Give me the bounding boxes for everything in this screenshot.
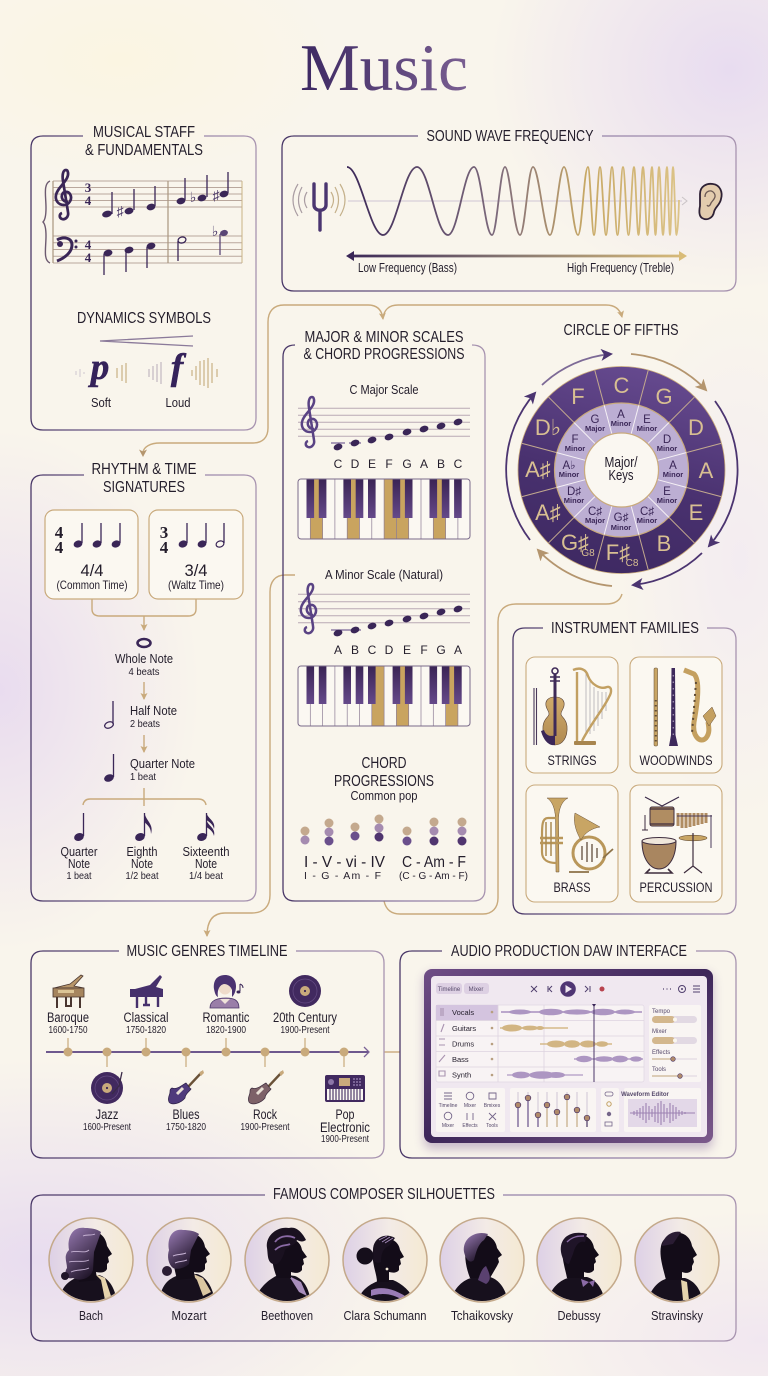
DAW tool grid: Tools	[486, 1123, 498, 1129]
major keys outer ring: E	[689, 500, 703, 525]
composer: Tchaikovsky	[440, 1218, 524, 1323]
icon: xylophone	[677, 813, 712, 848]
genre: rock: Rock	[253, 1107, 277, 1122]
whole note	[115, 639, 173, 678]
major keys outer ring: G8	[581, 548, 595, 559]
heading: scales	[304, 329, 464, 363]
quarter note	[103, 754, 195, 783]
heading: genres: MUSIC GENRES TIMELINE	[126, 943, 288, 960]
a minor scale: A Minor Scale (Natural)	[325, 568, 443, 582]
DAW toolbar: Mixer	[469, 987, 483, 993]
grand staff notation: 4	[85, 237, 92, 252]
icon: violin	[541, 668, 567, 745]
genre: 20th century: 1900-Present	[280, 1024, 330, 1036]
label: low frequency: Low Frequency (Bass)	[358, 261, 457, 275]
minor keys inner ring: Minor	[663, 470, 683, 479]
card: brass	[526, 785, 618, 902]
genre: classical	[124, 975, 168, 1036]
connector bracket	[83, 788, 206, 806]
note: quarter: Quarter	[60, 845, 98, 859]
waveform: drums	[540, 1040, 612, 1048]
composer: Stravinsky: Stravinsky	[651, 1308, 703, 1323]
minor keys inner ring: E	[663, 486, 671, 498]
major keys outer ring: D♭	[535, 415, 561, 440]
note: sixteenth: Sixteenth	[182, 845, 230, 859]
card: 4/4 common time: (Common Time)	[56, 578, 128, 592]
chord progression labels: (C - G - Am - F)	[399, 870, 468, 882]
genre: classical: Classical	[124, 1010, 168, 1025]
waveform: vocals	[501, 1009, 642, 1015]
icon: harp	[573, 669, 611, 745]
c major scale: D	[351, 457, 360, 471]
card: percussion	[630, 785, 722, 902]
grand staff notation: 3	[85, 180, 92, 195]
heading: chord progressions: PROGRESSIONS	[334, 773, 434, 790]
a minor scale: F	[420, 643, 428, 657]
arrows around wheel	[506, 354, 738, 586]
panel: major and minor scales and chord progressions	[283, 329, 485, 901]
minor keys inner ring: Major	[585, 424, 605, 433]
card: 3/4 waltz time: 3/4	[184, 561, 208, 580]
card: 3/4 waltz time: (Waltz Time)	[168, 578, 224, 592]
DAW tool grid	[436, 1088, 505, 1132]
minor keys inner ring: E	[643, 414, 651, 426]
card: strings	[526, 657, 618, 773]
genre: baroque	[47, 975, 89, 1036]
DAW side controls: Effects	[652, 1050, 670, 1056]
composer: Debussy: Debussy	[558, 1308, 601, 1323]
chord dots diagram	[300, 814, 466, 846]
half note: Half Note	[130, 704, 177, 718]
icon: clarinet	[669, 668, 678, 746]
major keys outer ring: G♯	[561, 530, 589, 555]
major keys outer ring: C8	[626, 558, 639, 569]
major keys outer ring: G	[655, 384, 673, 409]
DAW waveform editor: Waveform Editor	[621, 1092, 670, 1098]
minor keys inner ring: Minor	[611, 523, 631, 532]
card: 4/4 common time	[45, 510, 138, 599]
DAW tool grid: Bmixes	[484, 1103, 501, 1109]
c major scale: A	[420, 457, 428, 471]
minor keys inner ring: Minor	[559, 470, 579, 479]
major keys outer ring: B	[657, 531, 671, 556]
icon: saxophone	[684, 670, 716, 740]
DAW tool grid: Effects	[462, 1123, 478, 1129]
minor keys inner ring: G♯	[614, 512, 629, 524]
c major scale: C	[454, 457, 463, 471]
chord progression labels	[304, 854, 468, 882]
icon: bow	[534, 688, 536, 745]
center label: Major/	[604, 455, 638, 471]
note: quarter: 1 beat	[66, 870, 92, 882]
DAW tracks: Guitars	[452, 1024, 476, 1033]
major keys outer ring: C	[614, 373, 630, 398]
DAW window frame	[424, 969, 713, 1149]
waveform: synth	[507, 1071, 583, 1079]
connectors between panels	[139, 305, 622, 1052]
card: 4/4 common time: 4	[55, 538, 64, 557]
a minor scale: E	[403, 643, 411, 657]
genre: jazz: Jazz	[96, 1107, 119, 1122]
composer: Clara Schumann	[343, 1218, 427, 1323]
c major scale: E	[368, 457, 376, 471]
genre: jazz	[83, 1072, 131, 1133]
minor keys inner ring: D♯	[567, 486, 581, 498]
a minor scale: A	[454, 643, 462, 657]
a minor scale: B	[351, 643, 359, 657]
grand staff notation: 4	[85, 193, 92, 208]
card: percussion: PERCUSSION	[640, 880, 712, 895]
icon: flute	[654, 668, 658, 746]
genre: baroque: Baroque	[47, 1010, 89, 1025]
heading: chord progressions	[334, 755, 434, 803]
heading: scales: & CHORD PROGRESSIONS	[304, 346, 464, 363]
c major scale: B	[437, 457, 445, 471]
heading: rhythm: RHYTHM & TIME	[92, 461, 196, 478]
whole note: 4 beats	[128, 666, 160, 678]
heading: musical staff: & FUNDAMENTALS	[85, 142, 203, 159]
note: eighth	[126, 813, 159, 882]
panel: rhythm and time signatures	[31, 461, 256, 901]
icon: cymbal stand	[679, 833, 707, 873]
grand staff notation: ♯	[212, 187, 220, 203]
timeline axis	[46, 1038, 369, 1067]
genre: blues	[166, 1070, 206, 1133]
composer: Beethoven	[245, 1218, 329, 1323]
grand staff notation: ♭	[190, 189, 196, 205]
panel: sound wave frequency	[282, 128, 736, 291]
composer: Tchaikovsky: Tchaikovsky	[451, 1308, 513, 1323]
major keys outer ring: A	[699, 458, 714, 483]
heading: circle of fifths: CIRCLE OF FIFTHS	[564, 322, 678, 339]
heading: musical staff: MUSICAL STAFF	[93, 124, 195, 141]
grand staff notation	[43, 170, 242, 275]
card: woodwinds: WOODWINDS	[640, 753, 712, 768]
genre: blues: Blues	[172, 1107, 200, 1122]
major keys outer ring: D	[688, 415, 704, 440]
icon: ear	[699, 184, 722, 219]
c major scale: C Major Scale	[350, 383, 419, 397]
minor keys inner ring: Minor	[657, 496, 677, 505]
composer: Stravinsky	[635, 1218, 719, 1323]
DAW tool grid: Mixer	[464, 1103, 476, 1109]
panel: audio production DAW interface	[400, 943, 736, 1158]
grand staff notation: ♯	[116, 203, 124, 219]
minor keys inner ring: D	[663, 434, 671, 446]
minor keys inner ring: F	[571, 434, 579, 446]
center label: Keys	[608, 468, 634, 484]
panel: famous composer silhouettes	[31, 1186, 736, 1341]
waveform: bass	[574, 1056, 643, 1062]
note: eighth: Eighth	[126, 845, 158, 859]
minor keys inner ring: Minor	[565, 444, 585, 453]
crescendo hairpin	[100, 336, 193, 346]
icon: timpani	[642, 838, 676, 873]
center label	[604, 455, 638, 484]
genre: rock	[240, 1070, 290, 1133]
c major scale: G	[402, 457, 412, 471]
major keys outer ring: A♯	[525, 457, 551, 482]
composer: Mozart: Mozart	[172, 1308, 207, 1323]
wheel rings	[518, 366, 725, 574]
heading: chord progressions: Common pop	[350, 789, 418, 803]
major keys outer ring: A♯	[535, 500, 561, 525]
composer: Clara Schumann: Clara Schumann	[344, 1308, 426, 1323]
dynamic mark: soft	[76, 347, 126, 410]
card: 3/4 waltz time	[149, 510, 243, 599]
genre: pop electronic: Electronic	[320, 1120, 370, 1135]
piano keyboard: a minor	[298, 666, 470, 726]
DAW toolbar: Timeline	[438, 987, 461, 993]
arrow	[143, 735, 145, 752]
minor keys inner ring: Minor	[611, 419, 631, 428]
genre: blues: 1750-1820	[166, 1121, 206, 1133]
major keys outer ring: F♯	[606, 540, 630, 565]
DAW mixer faders	[510, 1088, 596, 1132]
DAW tracks: Vocals	[452, 1008, 474, 1017]
card: woodwinds	[630, 657, 722, 773]
composer: Bach: Bach	[79, 1308, 103, 1323]
note: eighth: 1/2 beat	[126, 870, 159, 882]
DAW tracks: Drums	[452, 1040, 474, 1048]
card: 4/4 common time: 4	[55, 523, 64, 542]
DAW waveform editor	[621, 1088, 701, 1132]
genre: 20th century: 20th Century	[273, 1010, 337, 1025]
genre: pop electronic: 1900-Present	[321, 1133, 369, 1145]
DAW tracks: Synth	[452, 1070, 471, 1080]
genre: romantic: Romantic	[202, 1010, 250, 1025]
genre: classical: 1750-1820	[126, 1024, 166, 1036]
composer: Bach	[49, 1218, 133, 1323]
heading: dynamics symbols: DYNAMICS SYMBOLS	[77, 310, 211, 327]
genre: jazz: 1600-Present	[83, 1121, 131, 1133]
DAW side controls: Tools	[652, 1067, 666, 1073]
DAW tracks	[436, 1004, 644, 1082]
DAW tool grid: Timeline	[439, 1103, 458, 1109]
DAW toolbar	[436, 981, 700, 997]
grand staff notation: ♭	[212, 223, 218, 239]
card: 4/4 common time: 4/4	[80, 561, 104, 580]
label: high frequency: High Frequency (Treble)	[567, 261, 674, 275]
card: strings: STRINGS	[548, 753, 596, 768]
heading: sound wave: SOUND WAVE FREQUENCY	[426, 128, 594, 145]
a minor scale: G	[436, 643, 446, 657]
arrow	[143, 682, 145, 699]
dynamic mark: loud	[149, 347, 217, 410]
note: sixteenth	[182, 813, 230, 882]
a minor scale: A	[334, 643, 342, 657]
waveform: guitars	[500, 1024, 568, 1032]
whole note: Whole Note	[115, 652, 173, 666]
genre: romantic	[202, 975, 250, 1036]
card: 3/4 waltz time: 4	[160, 538, 169, 557]
a minor scale	[298, 568, 470, 657]
major keys outer ring: F	[571, 384, 585, 409]
panel: musical staff and fundamentals	[31, 124, 256, 430]
genre: romantic: 1820-1900	[206, 1024, 246, 1036]
minor keys inner ring: C♯	[588, 506, 602, 518]
c major scale: F	[385, 457, 393, 471]
half note	[104, 701, 177, 730]
chart: frequency wave	[347, 167, 687, 235]
heading: chord progressions: CHORD	[362, 755, 406, 772]
minor keys inner ring: A	[617, 409, 625, 421]
DAW side controls: Tempo	[652, 1009, 671, 1015]
note: quarter	[60, 813, 98, 882]
composer: Mozart	[147, 1218, 231, 1323]
genre: pop electronic	[320, 1075, 370, 1145]
icon: trumpet	[540, 798, 568, 872]
composer: Beethoven: Beethoven	[261, 1308, 313, 1323]
heading: rhythm: SIGNATURES	[103, 479, 185, 496]
icon: french horn	[569, 813, 613, 872]
genre: pop electronic: Pop	[336, 1107, 354, 1122]
dynamic mark: soft: p	[88, 347, 109, 388]
icon: tuning fork	[293, 184, 345, 230]
heading: instruments: INSTRUMENT FAMILIES	[551, 620, 699, 637]
icon: snare drum	[642, 797, 679, 830]
card: 3/4 waltz time: 3	[160, 523, 168, 542]
heading: composers: FAMOUS COMPOSER SILHOUETTES	[273, 1186, 495, 1203]
DAW tool grid: Mixer	[442, 1123, 454, 1129]
dynamic mark: loud: f	[171, 347, 187, 388]
arrow: low to high frequency	[346, 251, 687, 261]
heading: musical staff	[85, 124, 203, 159]
a minor scale: D	[385, 643, 394, 657]
major keys outer ring	[525, 373, 714, 569]
quarter note: Quarter Note	[130, 757, 195, 771]
dynamic mark: loud: Loud	[166, 396, 191, 410]
note: quarter: Note	[68, 857, 90, 871]
DAW side controls: Mixer	[652, 1029, 667, 1035]
heading: scales: MAJOR & MINOR SCALES	[304, 329, 464, 346]
minor keys inner ring: G	[591, 414, 600, 426]
minor keys inner ring: A♭	[562, 460, 576, 472]
genre: baroque: 1600-1750	[48, 1024, 88, 1036]
c major scale: C	[334, 457, 343, 471]
minor keys inner ring	[559, 409, 683, 532]
minor keys inner ring: Minor	[657, 444, 677, 453]
heading: DAW: AUDIO PRODUCTION DAW INTERFACE	[451, 943, 687, 960]
genre: rock: 1900-Present	[240, 1121, 290, 1133]
DAW side controls	[649, 1005, 701, 1082]
note: sixteenth: 1/4 beat	[189, 870, 223, 882]
c major scale	[298, 383, 470, 471]
piano keyboard: c major	[298, 479, 470, 539]
connector bracket with arrow	[92, 599, 196, 630]
panel: music genres timeline	[31, 943, 384, 1158]
title: Music	[300, 31, 468, 105]
half note: 2 beats	[130, 718, 160, 730]
minor keys inner ring: A	[669, 460, 677, 472]
chord progression labels: C - Am - F	[402, 854, 466, 871]
panel: circle of fifths	[506, 322, 738, 586]
chord progression labels: I - G - Am - F	[304, 870, 381, 882]
minor keys inner ring: Minor	[564, 496, 584, 505]
minor keys inner ring: Major	[585, 516, 605, 525]
minor keys inner ring: Minor	[637, 424, 657, 433]
composer: Debussy	[537, 1218, 621, 1323]
DAW transport icons	[601, 1088, 619, 1132]
quarter note: 1 beat	[130, 771, 156, 783]
panel: instrument families	[513, 620, 736, 914]
minor keys inner ring: C♯	[640, 506, 654, 518]
dynamic mark: soft: Soft	[91, 396, 111, 410]
heading: rhythm	[92, 461, 196, 496]
a minor scale: C	[368, 643, 377, 657]
minor keys inner ring: Minor	[637, 516, 657, 525]
genre: 20th century	[273, 975, 337, 1036]
note: sixteenth: Note	[195, 857, 217, 871]
card: brass: BRASS	[554, 880, 590, 895]
chord progression labels: I - V - vi - IV	[304, 854, 385, 871]
DAW tracks: Bass	[452, 1055, 469, 1064]
note: eighth: Note	[131, 857, 153, 871]
grand staff notation: 4	[85, 250, 92, 265]
